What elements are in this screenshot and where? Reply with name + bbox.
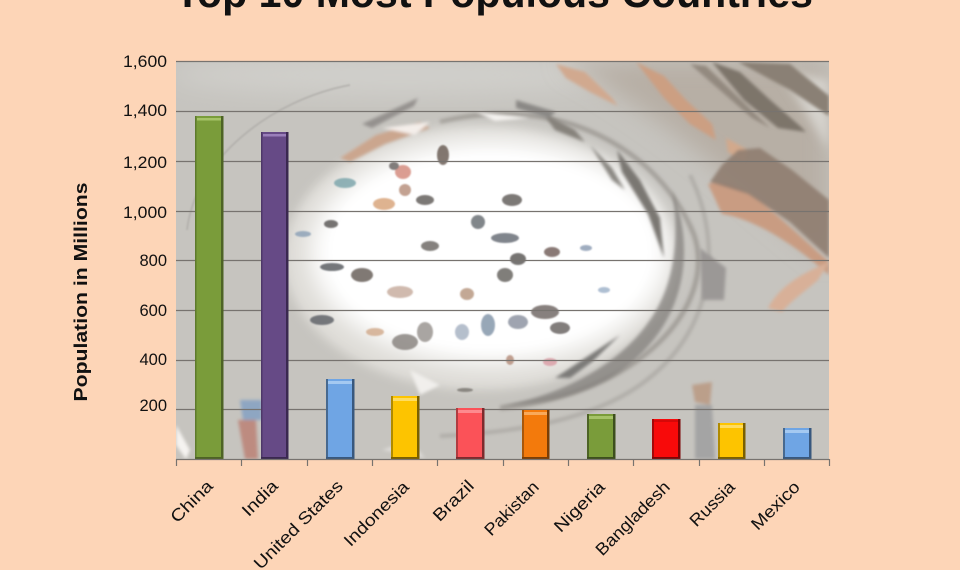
bar chart (195, 116, 812, 459)
bar: Mexico (783, 428, 812, 459)
x axis labels: Nigeria (550, 477, 609, 536)
x axis labels (167, 476, 804, 570)
bar: Russia (718, 423, 746, 459)
bar: India (261, 132, 288, 459)
gridlines (176, 62, 829, 410)
x axis labels: India (238, 476, 282, 520)
y axis labels: 400 (139, 351, 167, 369)
y axis title: Population in Millions (70, 182, 91, 402)
x axis labels: Bangladesh (592, 477, 674, 559)
people reflected (295, 145, 610, 392)
x axis labels: China (167, 476, 217, 527)
x axis labels: Pakistan (481, 477, 543, 540)
bar: Nigeria (587, 414, 616, 459)
bar: Bangladesh (652, 419, 680, 459)
streaks (176, 62, 829, 459)
y axis labels: 1,600 (123, 53, 167, 71)
bar: United States (326, 379, 354, 459)
x axis labels: Russia (686, 477, 739, 530)
bar: China (195, 116, 224, 459)
y axis labels (123, 53, 167, 415)
y axis labels: 1,200 (123, 154, 167, 172)
x axis labels: Indonesia (340, 477, 413, 550)
bar: Brazil (456, 408, 484, 459)
y axis labels: 800 (139, 252, 167, 270)
bar: Indonesia (391, 396, 420, 459)
y axis labels: 1,000 (123, 204, 167, 222)
background photo of reflective sculpture (170, 55, 829, 459)
chrome rings, right and lower side (440, 114, 698, 408)
x axis labels: Brazil (429, 476, 478, 525)
y axis labels: 600 (139, 302, 167, 320)
x axis labels: Mexico (747, 477, 804, 534)
y axis labels: 1,400 (123, 102, 167, 120)
bar: Pakistan (522, 410, 550, 459)
x axis with ticks (176, 459, 830, 466)
y axis labels: 200 (139, 397, 167, 415)
